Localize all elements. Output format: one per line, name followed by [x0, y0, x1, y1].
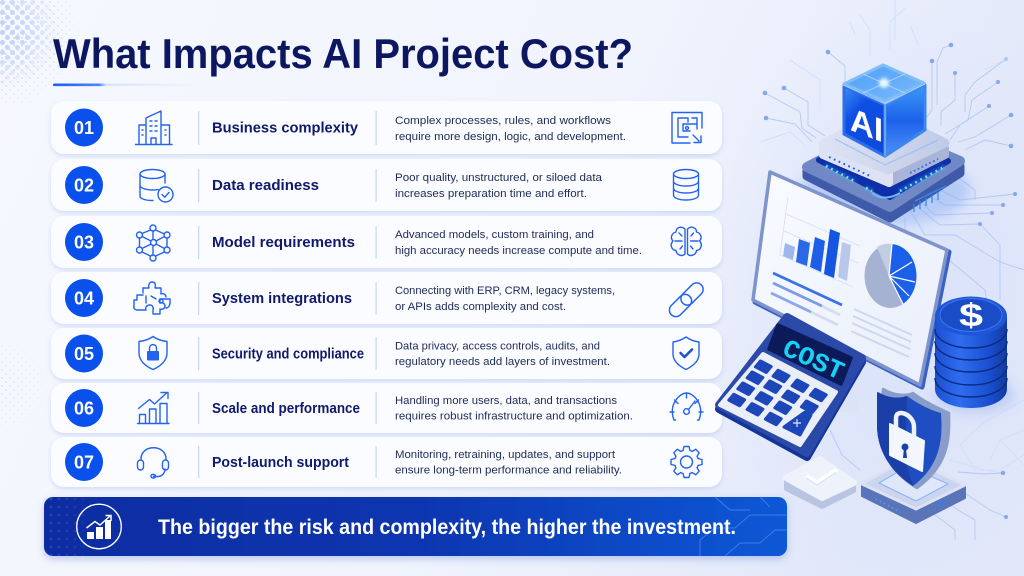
- icon: brain: [671, 227, 701, 255]
- panel: cost factor rows: [51, 101, 722, 487]
- description: ensure long-term performance and reliability.: [395, 464, 622, 476]
- description: Data privacy, access controls, audits, and: [395, 340, 600, 352]
- icon: growth chart: [138, 392, 169, 424]
- heading: model requirements: Model requirements: [212, 235, 355, 251]
- icon: growth chart in circle: [77, 504, 121, 549]
- heading: post-launch support: Post-launch support: [212, 455, 349, 471]
- heading: security and compliance: Security and compliance: [212, 346, 364, 362]
- report lines: [771, 273, 912, 357]
- description: Complex processes, rules, and workflows: [395, 115, 611, 127]
- number 01: [65, 108, 103, 146]
- illustration: AI infrastructure and cost: [719, 0, 1024, 540]
- number 03: 03: [74, 232, 94, 252]
- icon: office buildings: [136, 111, 172, 144]
- description: Connecting with ERP, CRM, legacy systems,: [395, 285, 615, 297]
- row 03: [51, 216, 722, 268]
- AI chip on platform: [800, 65, 970, 225]
- shield with padlock on base: [862, 389, 965, 523]
- icon: gear: [671, 446, 702, 478]
- heading: data readiness: Data readiness: [212, 178, 319, 194]
- banner text: The bigger the risk and complexity, the higher the investment.: [158, 516, 736, 539]
- COST readout: COST: [778, 334, 848, 387]
- calculator screen: [769, 325, 851, 384]
- number 07: [65, 443, 103, 481]
- icon: maze: [672, 112, 702, 143]
- description: increases preparation time and effort.: [395, 188, 587, 200]
- pie chart: [864, 244, 916, 308]
- heading: business complexity: Business complexity: [212, 120, 358, 136]
- icon: shield with lock: [139, 336, 167, 370]
- calculator keys: [727, 359, 828, 435]
- dollar coin stack: [935, 296, 1015, 413]
- shield: [877, 389, 949, 488]
- check button tile: [786, 459, 854, 507]
- icon: chain link: [667, 280, 706, 319]
- banner: key takeaway: [44, 497, 787, 556]
- title: What Impacts AI Project Cost?: [53, 30, 633, 77]
- upper platform: [823, 112, 945, 183]
- number 01: 01: [74, 118, 94, 138]
- AI cube: [843, 65, 925, 156]
- number 06: 06: [74, 398, 94, 418]
- icon: headset: [138, 448, 168, 478]
- number 05: [65, 334, 103, 372]
- row 07: [51, 437, 722, 487]
- number 05: 05: [74, 344, 94, 364]
- icon: database: [674, 170, 698, 200]
- calculator: [719, 317, 862, 457]
- description: or APIs adds complexity and cost.: [395, 301, 566, 313]
- dollar sign: $: [959, 297, 983, 333]
- row 05: [51, 328, 722, 379]
- row 02: [51, 159, 722, 211]
- number 03: [65, 223, 103, 261]
- icon: neural network: [136, 225, 170, 261]
- number 04: [65, 279, 103, 317]
- chart axes: [780, 197, 860, 287]
- number 07: 07: [74, 452, 94, 472]
- dashboard monitor: [753, 172, 949, 414]
- description: Advanced models, custom training, and: [395, 229, 594, 241]
- heading: system integrations: System integrations: [212, 291, 352, 307]
- description: Handling more users, data, and transactions: [395, 395, 617, 407]
- AI label: AI: [850, 101, 883, 150]
- number 02: 02: [74, 176, 94, 196]
- monitor stand: [840, 390, 860, 414]
- icon: database with check: [140, 170, 173, 202]
- row 04: [51, 272, 722, 324]
- title underline: [53, 84, 193, 86]
- description: require more design, logic, and development.: [395, 131, 626, 143]
- icon: shield with check: [673, 337, 699, 370]
- description: Poor quality, unstructured, or siloed data: [395, 172, 603, 184]
- icon: speedometer gauge: [670, 393, 703, 420]
- circuit lines: [760, 0, 1024, 540]
- description: Monitoring, retraining, updates, and support: [395, 449, 616, 461]
- row 01: [51, 101, 722, 154]
- description: high accuracy needs increase compute and time.: [395, 245, 642, 257]
- number 06: [65, 389, 103, 427]
- lower platform: [807, 128, 960, 218]
- bar chart: [783, 229, 851, 281]
- description: requires robust infrastructure and optimization.: [395, 410, 633, 422]
- icon: puzzle pieces: [134, 282, 170, 314]
- description: regulatory needs add layers of investment.: [395, 356, 610, 368]
- number 04: 04: [74, 288, 94, 308]
- heading: scale and performance: Scale and performance: [212, 401, 360, 417]
- row 06: [51, 383, 722, 433]
- shield base: [862, 458, 965, 523]
- padlock: [890, 413, 924, 471]
- number 02: [65, 166, 103, 204]
